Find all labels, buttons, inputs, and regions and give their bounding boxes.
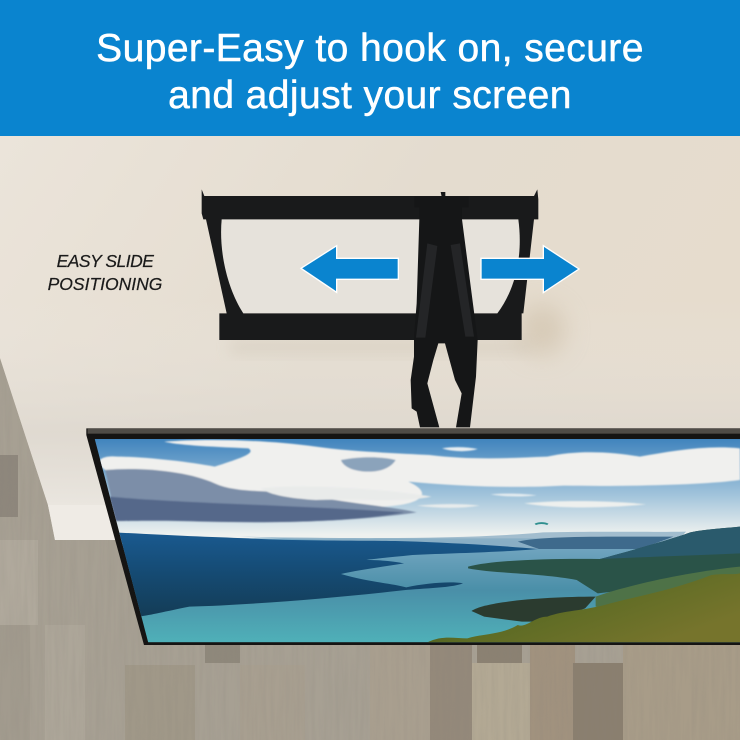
arrow: left <box>301 246 398 292</box>
floor <box>0 340 740 740</box>
clouds <box>99 440 740 522</box>
right peninsula and mountain <box>468 527 740 593</box>
foreground forest <box>427 573 740 642</box>
green slope <box>596 567 740 612</box>
right opening <box>462 219 520 313</box>
mount rails and side brackets <box>202 189 538 340</box>
caption: easy slide positioning <box>48 251 162 294</box>
caption: easy slide positioning: POSITIONING <box>48 274 162 294</box>
title: Super-Easy to hook on, secure <box>96 27 644 70</box>
title: and adjust your screen <box>168 74 572 117</box>
title <box>96 27 644 117</box>
header banner <box>0 0 740 136</box>
far hills <box>240 532 686 549</box>
left opening <box>221 219 423 313</box>
lake <box>105 538 740 642</box>
town shoreline <box>471 597 596 622</box>
wall mount <box>202 189 538 427</box>
tv frame <box>86 428 740 645</box>
articulating arm assembly <box>411 192 478 427</box>
paraglider <box>535 522 548 525</box>
arrow: right <box>481 246 579 293</box>
left landmass <box>114 532 538 617</box>
television <box>86 428 740 645</box>
baseboard <box>48 505 130 540</box>
caption: easy slide positioning: EASY SLIDE <box>57 251 153 271</box>
arm highlights <box>416 243 474 338</box>
screen image <box>93 438 740 642</box>
wall <box>0 136 740 540</box>
